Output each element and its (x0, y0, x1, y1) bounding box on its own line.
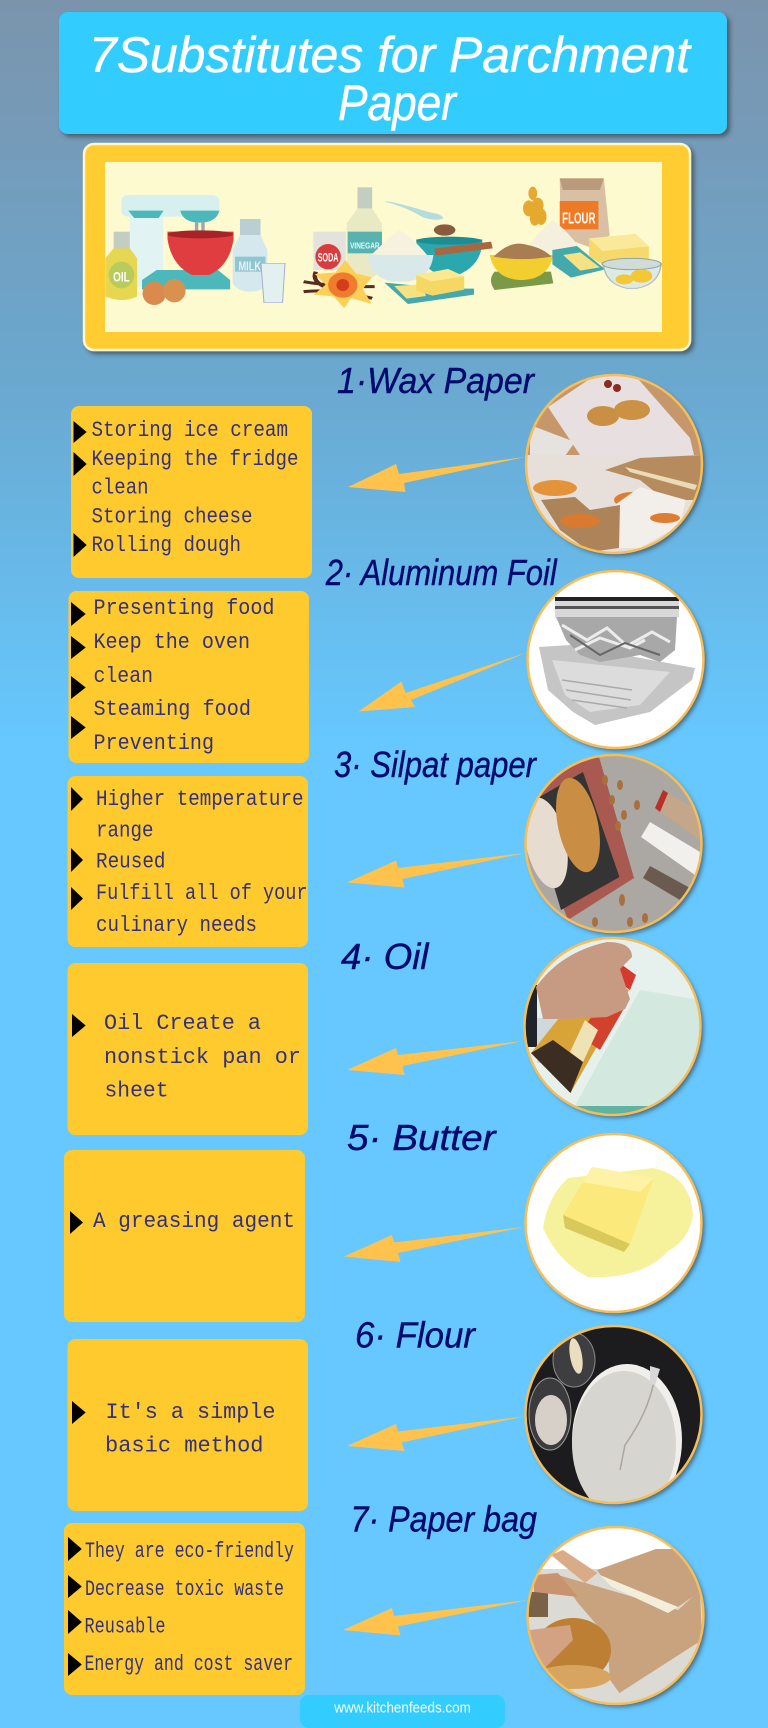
panel: silpat paper uses: Reused (96, 850, 166, 874)
photo: wax paper (520, 370, 710, 555)
panel: wax paper uses (71, 406, 312, 578)
footer url badge (300, 1695, 505, 1728)
panel: flour uses (68, 1339, 308, 1511)
icon: milk bottle and glass (233, 219, 285, 303)
photo: silpat mat (517, 750, 710, 940)
arrow: flour (347, 1416, 524, 1451)
icon: butter block and dish (552, 234, 649, 278)
icon: flour bag: FLOUR (562, 210, 596, 227)
heading: 7 Paper bag: 7· Paper bag (350, 1498, 537, 1540)
arrow: silpat paper (347, 853, 525, 888)
panel: paper bag uses: Energy and cost saver (84, 1652, 293, 1677)
panel: aluminum foil uses (68, 591, 309, 763)
arrow: oil (347, 1041, 523, 1075)
heading: 2 Aluminum Foil: 2· Aluminum Foil (325, 552, 558, 593)
heading: 4 Oil: 4· Oil (341, 936, 430, 977)
icon: teal bowl with rolling pin (416, 224, 493, 277)
icon: wheat (523, 187, 547, 226)
footer url badge: www.kitchenfeeds.com (333, 1700, 471, 1716)
arrow: butter (344, 1227, 524, 1262)
panel: paper bag uses: Reusable (84, 1614, 166, 1640)
panel: wax paper uses: Rolling dough (92, 533, 241, 558)
heading: 5 Butter: 5· Butter (347, 1117, 498, 1158)
icon: soda box: SODA (318, 251, 338, 265)
icon: oil bottle (105, 232, 137, 300)
icon: measuring spoon (384, 201, 443, 220)
panel: silpat paper uses (68, 776, 308, 947)
heading: 1 Wax Paper: 1·Wax Paper (337, 360, 536, 401)
icon: oil bottle: OIL (113, 269, 130, 285)
photo: butter (526, 1134, 702, 1312)
panel: paper bag uses: They are eco-friendly (85, 1539, 294, 1564)
icon: flour pile (524, 220, 583, 252)
icon: milk bottle and glass: MILK (238, 259, 261, 274)
panel: flour uses: It's a simple (106, 1400, 276, 1425)
title banner: Paper (338, 75, 458, 131)
heading: 6 Flour: 6· Flour (355, 1314, 477, 1356)
title banner (59, 12, 727, 134)
panel: baking ingredients illustration (84, 144, 690, 350)
photo: paper bag (520, 1527, 710, 1709)
photo: oil spray (520, 935, 710, 1120)
panel: flour uses: basic method (105, 1434, 264, 1458)
panel: oil uses: sheet (104, 1078, 168, 1104)
panel: wax paper uses: Storing cheese (92, 504, 252, 530)
icon: yellow bowl with sugar (490, 244, 553, 290)
panel: aluminum foil uses: Presenting food (94, 596, 274, 621)
icon: vinegar bottle (347, 187, 382, 278)
icon: flour bag (560, 178, 610, 250)
photo: flour dusted pan (520, 1320, 710, 1517)
panel: wax paper uses: Storing ice cream (92, 418, 288, 443)
icon: mesh bowl with flour (367, 230, 433, 282)
panel: butter uses: A greasing agent (93, 1209, 295, 1234)
icon: soda box (313, 232, 346, 270)
panel: oil uses: nonstick pan or (104, 1045, 301, 1070)
panel: oil uses: Oil Create a (104, 1011, 261, 1036)
icon: eggs (143, 279, 186, 305)
icon: vanilla flower (304, 260, 375, 308)
icon: vinegar bottle: VINEGAR (350, 241, 380, 251)
panel: paper bag uses: Decrease toxic waste (85, 1577, 284, 1602)
panel: oil uses (68, 963, 308, 1135)
panel: paper bag uses (64, 1523, 305, 1695)
panel: aluminum foil uses: Keep the oven (94, 630, 250, 655)
icon: stand mixer (121, 195, 234, 289)
arrow: aluminum foil (358, 652, 526, 712)
icon: glass bowl with eggs (602, 258, 661, 288)
photo: aluminum foil (528, 571, 704, 748)
panel: wax paper uses: Keeping the fridge (92, 447, 298, 472)
title banner: 7Substitutes for Parchment (89, 27, 692, 83)
panel: aluminum foil uses: clean (94, 664, 153, 689)
panel: silpat paper uses: Fulfill all of your (96, 881, 308, 906)
panel: aluminum foil uses: Steaming food (94, 697, 251, 722)
panel: butter uses (64, 1150, 305, 1322)
icon: butter on tray (384, 269, 474, 304)
arrow: paper bag (343, 1600, 528, 1636)
arrow: wax paper (348, 457, 525, 492)
panel: silpat paper uses: range (96, 818, 154, 844)
panel: aluminum foil uses: Preventing (94, 731, 214, 756)
heading: 3 Silpat paper: 3· Silpat paper (334, 744, 538, 785)
panel: silpat paper uses: Higher temperature (96, 787, 304, 812)
panel: wax paper uses: clean (92, 476, 148, 500)
panel: silpat paper uses: culinary needs (96, 913, 257, 938)
